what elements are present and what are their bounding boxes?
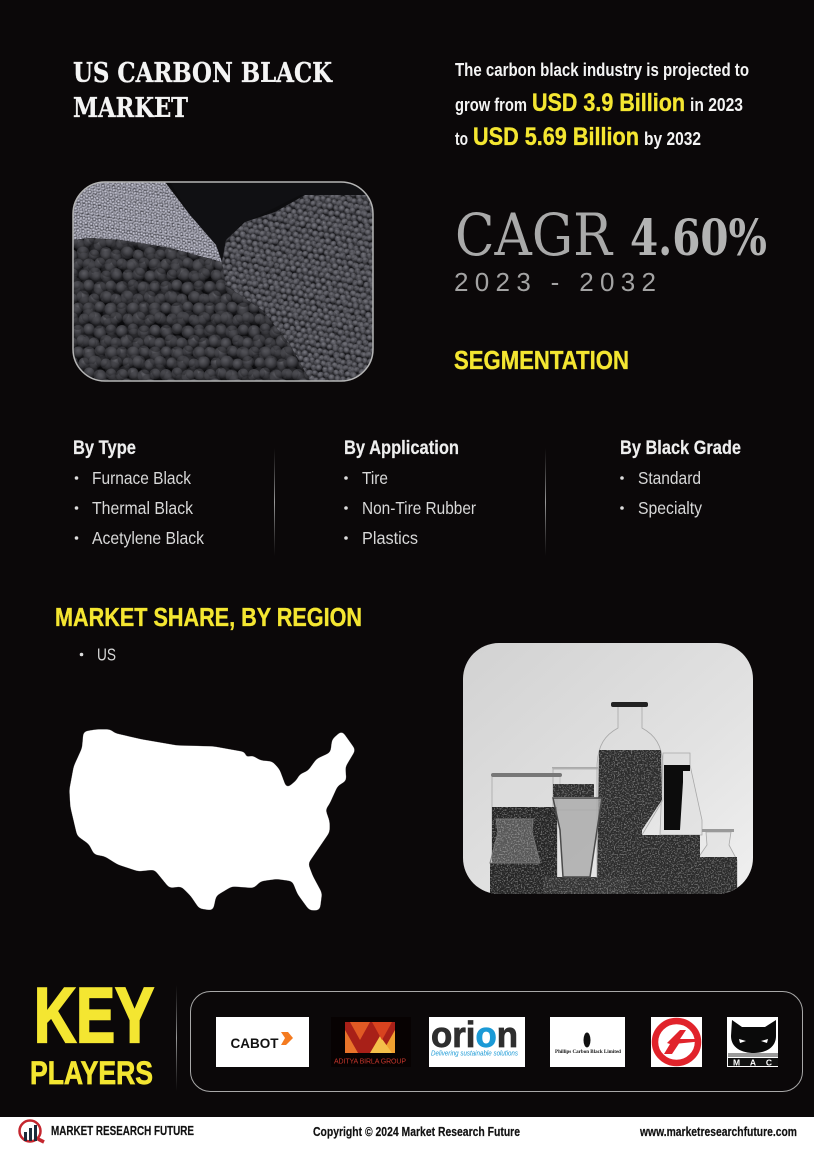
segment list: by application [344,438,476,548]
segment list: by black grade: Specialty [638,498,702,518]
logo: black cat: MAC [733,1058,772,1068]
heading: key players: KEY [34,971,154,1059]
footer bar [0,1117,814,1150]
title: US CARBON BLACK [73,58,333,89]
logo: black cat [727,1017,778,1068]
segment list: by black grade: Standard [638,468,701,488]
logo: Cabot: CABOT [230,1035,279,1051]
segment list: by black grade: By Black Grade [620,438,741,459]
market projection text: USD 5.69 Billion [473,123,639,151]
panel: key player logos [190,992,802,1092]
segment list: by type: By Type [73,438,136,459]
logo: Phillips Carbon Black: Phillips Carbon Black Limited [555,1050,621,1055]
market projection text: by 2032 [644,129,701,149]
image: carbon black pellets [73,182,373,381]
icon: US map [71,731,354,909]
segment list: by black grade [620,438,741,518]
segment list: by type [73,438,204,548]
jar lids [611,702,648,707]
logo: Orion: orion [431,1014,518,1055]
CAGR figure: 4.60% [630,208,767,267]
logo: Tokai red ring [651,1017,702,1067]
market projection text: The carbon black industry is projected to [455,60,749,80]
logo: Aditya Birla Group: ADITYA BIRLA GROUP [334,1058,406,1066]
footer bar: MARKET RESEARCH FUTURE [51,1123,194,1138]
image: glass jars with carbon black [463,643,753,894]
region list [80,644,116,664]
segment list: by application: By Application [344,438,459,459]
title: MARKET [73,93,188,124]
jar contents [597,750,662,894]
CAGR figure [454,201,767,297]
logo: Orion: Delivering sustainable solutions [431,1050,518,1058]
segment list: by application: Plastics [362,528,418,548]
logo: Aditya Birla Group [331,1017,411,1067]
segment list: by type: Furnace Black [92,468,191,488]
logo: Cabot [216,1017,309,1067]
market projection text: grow from [455,95,527,115]
heading: segmentation: SEGMENTATION [454,347,629,375]
title [73,58,333,124]
market projection text: USD 3.9 Billion [532,89,685,117]
segment list: by type: Thermal Black [92,498,193,518]
icon: Market Research Future logo [20,1120,44,1142]
CAGR figure: CAGR [455,201,614,269]
region list: US [97,644,116,664]
segment list: by application: Non-Tire Rubber [362,498,476,518]
front beaker [553,798,602,877]
market projection text: in 2023 [690,95,743,115]
heading: key players [30,971,154,1091]
market projection text [455,60,749,151]
heading: market share by region: MARKET SHARE, BY REGION [55,604,362,632]
footer bar: Copyright © 2024 Market Research Future [313,1124,520,1139]
glass jar outlines [492,706,737,894]
segment list: by type: Acetylene Black [92,528,204,548]
segment list: by application: Tire [362,468,388,488]
market projection text: to [455,129,468,149]
heading: key players: PLAYERS [30,1055,153,1091]
CAGR figure: 2023 - 2032 [454,267,656,297]
logo: Phillips Carbon Black [550,1017,625,1067]
